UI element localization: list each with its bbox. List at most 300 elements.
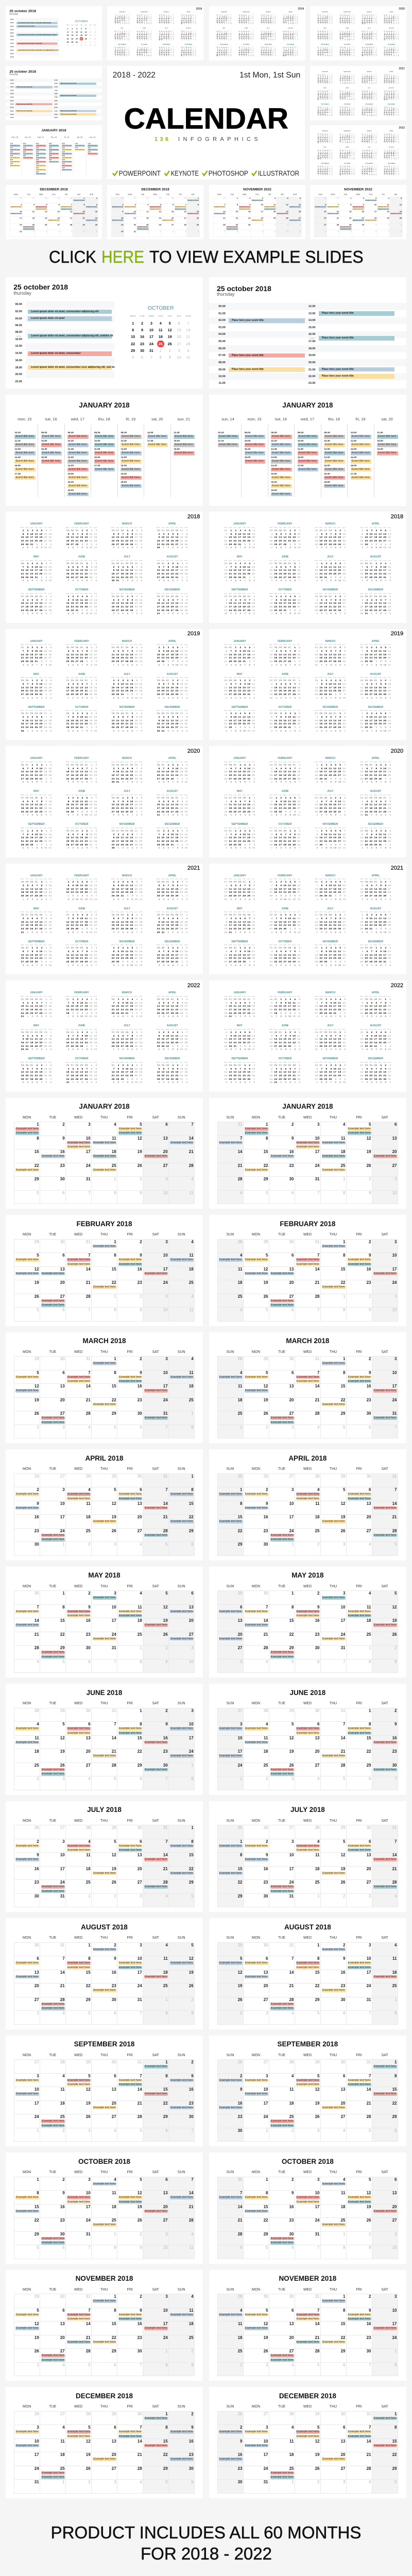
date grid: 21 bbox=[138, 2452, 142, 2457]
date grid bbox=[217, 2059, 398, 2142]
date grid: 8 bbox=[62, 1605, 65, 1609]
month: FEB bbox=[262, 640, 307, 673]
date grid: Example text here bbox=[67, 1141, 90, 1144]
date grid: 20 bbox=[289, 1280, 294, 1285]
date grid: 12 bbox=[138, 1136, 142, 1141]
date grid: Example text here bbox=[145, 1885, 167, 1888]
day columns: 08.25 bbox=[94, 431, 100, 434]
day columns: Event title here bbox=[299, 468, 317, 471]
date grid: 3 bbox=[62, 1425, 65, 1430]
date grid: 5 bbox=[37, 1308, 39, 1312]
month: MAR bbox=[358, 130, 381, 147]
date grid: 30 bbox=[138, 2349, 142, 2353]
date grid: 1 bbox=[343, 2232, 345, 2236]
month: JAN: SUN MON TUE WED THU FRI SAT bbox=[224, 761, 255, 763]
day columns: Event title here bbox=[299, 443, 317, 446]
date grid: 12 bbox=[86, 2439, 91, 2444]
panel: year 2018 thumbnail bbox=[107, 6, 203, 60]
month: JAN: JANUARY bbox=[30, 757, 43, 760]
date grid: 12 bbox=[163, 1605, 168, 1609]
month: JUN: 31 1 2 3 4 5 6 7 8 9 10 11 12 13 14 15 16 17 18 19 20 21 22 23 24 25 26 27 28 29 30 1 2 3 4 5 6 7 8 9 10 11 bbox=[66, 914, 97, 934]
month: NOV bbox=[105, 940, 150, 973]
date grid bbox=[217, 1942, 398, 2025]
agenda title: 25 october 2018 bbox=[10, 70, 36, 73]
date grid: Example text here bbox=[74, 199, 84, 201]
title: NOVEMBER 2018 bbox=[279, 2275, 336, 2282]
month: JAN: JANUARY bbox=[221, 11, 227, 13]
date grid: 16 bbox=[315, 1618, 319, 1623]
date grid: 30 bbox=[112, 1997, 116, 2002]
date grid: Example text here bbox=[374, 2417, 396, 2420]
date grid: 20 bbox=[289, 2335, 294, 2340]
date grid: 7 bbox=[191, 2177, 194, 2182]
date grid: 6 bbox=[369, 1776, 371, 1781]
date grid: Example text here bbox=[374, 2210, 396, 2213]
date grid: 26 bbox=[238, 1997, 242, 2002]
date grid: 8 bbox=[165, 2074, 168, 2078]
date grid: Example text here bbox=[322, 1403, 345, 1406]
month: OCT: SUN MON TUE WED THU FRI SAT bbox=[269, 593, 301, 595]
month: MAY bbox=[217, 673, 262, 706]
month: NOV: NOVEMBER bbox=[119, 940, 135, 943]
weekday header: FRI bbox=[356, 1702, 362, 1705]
date grid: 27 bbox=[112, 2114, 116, 2119]
date grid: 17 bbox=[238, 1749, 242, 1754]
date grid: 30 bbox=[341, 2412, 345, 2416]
day columns: Event title here bbox=[272, 484, 290, 487]
date grid: 5 bbox=[338, 230, 339, 233]
month: AUG bbox=[150, 790, 195, 823]
month: APR: 30 31 1 2 3 4 5 6 7 8 9 10 11 12 13 14 15 16 17 18 19 20 21 22 23 24 25 26 27 28 29 30 1 2 3 4 5 6 7 8 9 10 bbox=[157, 764, 187, 784]
date grid: 9 bbox=[291, 2191, 294, 2195]
panel: two-column agenda thumbnail: 13.00 bbox=[54, 83, 58, 84]
month: JUN: 27 28 29 30 31 1 2 3 4 5 6 7 8 9 10 11 12 13 14 15 16 17 18 19 20 21 22 23 24 25 26 27 28 29 30 1 2 3 4 5 6 7 bbox=[269, 563, 300, 582]
date grid: Example text here bbox=[353, 219, 364, 221]
date grid: 7 bbox=[394, 1839, 397, 1844]
date grid: 11 bbox=[238, 2321, 242, 2326]
weekday header bbox=[14, 2053, 194, 2058]
date grid: Example text here bbox=[348, 1127, 370, 1130]
month: JUL: JULY bbox=[368, 88, 371, 89]
date grid: 3 bbox=[394, 1177, 397, 1181]
month: NOV bbox=[105, 823, 150, 856]
date grid: 23 bbox=[248, 217, 250, 219]
weekday header: SUN bbox=[178, 1350, 185, 1354]
month: AUG: MON TUE WED THU FRI SAT SUN bbox=[157, 794, 188, 796]
date grid: 17 bbox=[35, 2101, 39, 2106]
date grid: 7 bbox=[291, 1956, 294, 1961]
weekday header: MON bbox=[252, 1116, 260, 1119]
month: NOV: MON TUE WED THU FRI SAT SUN bbox=[261, 46, 276, 47]
weekday header: THU bbox=[369, 194, 372, 196]
date grid: 24 bbox=[86, 2218, 91, 2223]
panel: March 2018, Monday start bbox=[6, 1332, 203, 1443]
date grid: Example text here bbox=[119, 1497, 142, 1500]
date grid: 2 bbox=[369, 1294, 371, 1299]
date grid: 27 bbox=[60, 2412, 65, 2416]
date grid: 3 bbox=[37, 2425, 39, 2430]
date grid: 10 bbox=[163, 2308, 168, 2313]
panel: daily agenda with mini calendar: 04.00 bbox=[15, 317, 22, 320]
month: OCT: 29 30 1 2 3 4 5 6 7 8 9 10 11 12 13 14 15 16 17 18 19 20 21 22 23 24 25 26 27 28 29 30 31 1 2 3 4 5 6 7 8 9 bbox=[269, 713, 300, 733]
date grid: 4 bbox=[37, 1722, 39, 1726]
panel: agenda thumbnail: Lorem ipsum dolor sit amet, consectetur bbox=[18, 43, 42, 44]
panel: two-column agenda thumbnail: 16.00 bbox=[54, 93, 58, 95]
date grid: Example text here bbox=[245, 1961, 267, 1964]
date grid: Example text here bbox=[227, 228, 237, 230]
mini calendar dates: 2 bbox=[169, 348, 171, 353]
date grid: 2 bbox=[191, 1997, 194, 2002]
date grid: 26 bbox=[189, 1984, 194, 1988]
day columns: Event title here bbox=[299, 435, 317, 438]
mini calendar dates: 6 bbox=[90, 28, 91, 30]
date grid: 7 bbox=[317, 1308, 319, 1312]
date grid: 24 bbox=[35, 2114, 39, 2119]
mini calendar dates: 19 bbox=[168, 334, 172, 339]
date grid: 20 bbox=[171, 217, 174, 219]
panel: cover bbox=[107, 66, 305, 179]
month: SEP: SUN MON TUE WED THU FRI SAT bbox=[224, 593, 255, 595]
date grid: 8 bbox=[191, 1776, 194, 1781]
month: MAY: 1 2 3 4 5 6 7 8 9 10 11 12 13 14 15 16 17 18 19 20 21 22 23 24 25 26 27 28 29 30 31 1 2 3 4 5 6 7 8 9 10 11 bbox=[224, 1031, 255, 1051]
month: JUN bbox=[262, 555, 307, 588]
month: SEP: 26 27 28 29 30 31 1 2 3 4 5 6 7 8 9 10 11 12 13 14 15 16 17 18 19 20 21 22 23 24 25 26 27 28 29 30 1 2 3 4 5 6 bbox=[216, 47, 231, 57]
date grid: 13 bbox=[138, 1501, 142, 1506]
date grid: 8 bbox=[37, 1136, 39, 1141]
date grid: Example text here bbox=[93, 1948, 116, 1951]
date grid: Example text here bbox=[271, 1303, 293, 1307]
date grid: Example text here bbox=[348, 2079, 370, 2082]
weekday header: TUE bbox=[49, 2171, 56, 2174]
date grid: Example text here bbox=[219, 2196, 242, 2199]
month: MAY: SUN MON TUE WED THU FRI SAT bbox=[224, 911, 255, 913]
date grid: 9 bbox=[369, 2308, 371, 2313]
date grid: 6 bbox=[191, 2480, 194, 2484]
month: SEP: SEPTEMBER bbox=[231, 823, 248, 826]
date grid: 17 bbox=[189, 1736, 194, 1740]
panel: October 2018, Sunday start bbox=[209, 2153, 406, 2264]
date grid: 23 bbox=[367, 1280, 371, 1285]
date grid: Example text here bbox=[145, 2327, 167, 2330]
panel: two-column daily agenda: 01.00 bbox=[218, 312, 226, 315]
month: SEP: SEPTEMBER bbox=[231, 706, 248, 709]
title: DECEMBER 2018 bbox=[76, 2392, 133, 2400]
day columns: Event title here bbox=[378, 451, 397, 454]
date grid: 6 bbox=[140, 1487, 142, 1492]
date grid: 5 bbox=[291, 1659, 294, 1664]
panel: November 2022 thumbnail, Monday start bbox=[209, 185, 305, 239]
date grid: 22 bbox=[112, 1280, 116, 1285]
day columns: Event title here bbox=[89, 149, 97, 150]
day columns: 14.40 bbox=[10, 155, 13, 156]
date grid: 23 bbox=[138, 1280, 142, 1285]
day columns: 13.00 bbox=[121, 456, 127, 459]
date grid: 18 bbox=[189, 2321, 194, 2326]
date grid: 10 bbox=[35, 2439, 39, 2444]
date grid: 21 bbox=[289, 1984, 294, 1988]
month: JUN: 28 29 30 31 1 2 3 4 5 6 7 8 9 10 11 12 13 14 15 16 17 18 19 20 21 22 23 24 25 26 27 28 29 30 1 2 3 4 5 6 7 8 bbox=[66, 563, 97, 582]
date grid: 30 bbox=[264, 1591, 268, 1596]
month: AUG: AUGUST bbox=[186, 28, 191, 29]
date grid: 20 bbox=[138, 1515, 142, 1519]
month: MAR: MARCH bbox=[367, 71, 372, 73]
month: JAN: MON TUE WED THU FRI SAT SUN bbox=[21, 878, 52, 880]
weekday header bbox=[14, 1936, 194, 1940]
date grid: 22 bbox=[315, 1984, 319, 1988]
month: JUL: 29 30 1 2 3 4 5 6 7 8 9 10 11 12 13 14 15 16 17 18 19 20 21 22 23 24 25 26 27 28 29 30 31 1 2 3 4 5 6 7 8 9 bbox=[112, 797, 142, 817]
day columns: Event title here bbox=[89, 145, 97, 146]
weekday header: FRI bbox=[356, 2287, 362, 2292]
date grid bbox=[111, 197, 199, 237]
month: JAN bbox=[314, 71, 336, 88]
date grid: 3 bbox=[369, 1894, 371, 1899]
date grid: 3 bbox=[343, 1542, 345, 1547]
date grid: 27 bbox=[86, 1763, 91, 1768]
heading: click here bbox=[0, 242, 412, 273]
date grid: 25 bbox=[315, 1880, 319, 1885]
weekday header: SAT bbox=[381, 2287, 388, 2292]
heading: product includes bbox=[0, 2519, 412, 2566]
date grid: Example text here bbox=[322, 1754, 345, 1757]
day columns: 11.30 bbox=[377, 431, 383, 434]
panel: two-column daily agenda: Place here your event title bbox=[322, 336, 354, 340]
date grid: Example text here bbox=[322, 1989, 345, 1992]
panel: December 2018, Monday start bbox=[6, 2387, 203, 2498]
month: MAR: 1 2 3 4 5 6 7 8 9 10 11 12 13 14 15 16 17 18 19 20 21 22 23 24 25 26 27 28 29 30 31 1 2 3 4 5 6 7 8 9 10 11 bbox=[315, 764, 346, 784]
date grid: Example text here bbox=[42, 1651, 64, 1654]
date grid: 2 bbox=[46, 230, 47, 233]
date grid bbox=[213, 197, 301, 237]
mini calendar dates: 4 bbox=[187, 348, 190, 353]
day columns: Event title here bbox=[62, 145, 72, 146]
date grid: 2 bbox=[291, 2128, 294, 2133]
month: JUN: JUNE bbox=[78, 907, 85, 910]
date grid: Example text here bbox=[374, 1389, 396, 1392]
date grid: 3 bbox=[287, 224, 288, 226]
date grid: 12 bbox=[35, 1267, 39, 1272]
date grid: 15 bbox=[235, 210, 238, 213]
date grid: 14 bbox=[163, 1853, 168, 1857]
date grid: Example text here bbox=[67, 1258, 90, 1261]
month: FEB: 31 1 2 3 4 5 6 7 8 9 10 11 12 13 14 15 16 17 18 19 20 21 22 23 24 25 26 27 28 1 2 3 4 5 6 7 8 9 10 11 12 13 bbox=[66, 998, 97, 1018]
date grid: 18 bbox=[146, 217, 148, 219]
month: NOV: MON TUE WED THU FRI SAT SUN bbox=[111, 593, 143, 595]
month: JUN: JUNE bbox=[244, 28, 248, 29]
date grid bbox=[14, 1825, 195, 1907]
date grid: Example text here bbox=[16, 1506, 39, 1510]
mini calendar dates: 7 bbox=[150, 355, 152, 360]
mini calendar dates: 10 bbox=[149, 328, 153, 332]
mini calendar dates: 31 bbox=[149, 348, 153, 353]
date grid: 4 bbox=[317, 1839, 319, 1844]
date grid: 31 bbox=[20, 230, 22, 233]
date grid: 28 bbox=[238, 1240, 242, 1244]
date grid: 12 bbox=[341, 1501, 345, 1506]
weekday header: FRI bbox=[179, 194, 182, 196]
date grid: 23 bbox=[362, 217, 364, 219]
date grid: Example text here bbox=[119, 1380, 142, 1383]
date grid: 8 bbox=[191, 1839, 194, 1844]
date grid: 5 bbox=[37, 2245, 39, 2250]
month: JUN: JUNE bbox=[281, 555, 288, 558]
weekday header: WED bbox=[153, 194, 157, 196]
date grid: 11 bbox=[367, 1605, 371, 1609]
date grid: 20 bbox=[58, 217, 60, 219]
month: APR bbox=[353, 757, 398, 790]
day columns: Event title here bbox=[122, 451, 140, 454]
date grid: 29 bbox=[341, 1474, 345, 1479]
date grid: 4 bbox=[343, 1122, 345, 1127]
month: SEP bbox=[217, 706, 262, 739]
date grid: 3 bbox=[135, 204, 136, 206]
panel: daily agenda with mini calendar bbox=[6, 277, 203, 388]
month: DEC: 29 30 1 2 3 4 5 6 7 8 9 10 11 12 13 14 15 16 17 18 19 20 21 22 23 24 25 26 27 28 29 30 31 1 2 3 4 5 6 7 8 9 bbox=[360, 830, 391, 850]
date grid: 20 bbox=[341, 2452, 345, 2457]
date grid: 8 bbox=[114, 2308, 116, 2313]
panel: May 2018, Sunday start bbox=[209, 1566, 406, 1677]
weekday header: THU bbox=[330, 1467, 337, 1471]
date grid: Example text here bbox=[170, 1258, 193, 1261]
date grid: 8 bbox=[266, 2191, 268, 2195]
weekday header: FRI bbox=[356, 1585, 362, 1588]
date grid: 5 bbox=[394, 1591, 397, 1596]
date grid: 21 bbox=[70, 217, 72, 219]
date grid: Example text here bbox=[271, 1155, 293, 1158]
panel: two-column agenda thumbnail: 16.30 bbox=[55, 95, 57, 96]
month: MAR: MARCH bbox=[325, 757, 335, 760]
date grid bbox=[14, 1590, 195, 1673]
date grid: 25 bbox=[112, 2218, 116, 2223]
month: JUL: 27 28 29 30 1 2 3 4 5 6 7 8 9 10 11 12 13 14 15 16 17 18 19 20 21 22 23 24 25 26 27 28 29 30 31 1 2 3 4 5 6 7 bbox=[112, 1031, 142, 1051]
date grid: 27 bbox=[35, 2060, 39, 2064]
date grid: 24 bbox=[112, 1632, 116, 1637]
date grid: 11 bbox=[264, 1736, 268, 1740]
check and label: Photoshop: PHOTOSHOP bbox=[209, 168, 248, 177]
mini calendar dates: 2 bbox=[72, 28, 73, 30]
weekday header: FRI bbox=[356, 2054, 362, 2057]
date grid: 16 bbox=[289, 1149, 294, 1154]
day columns: 15.00 bbox=[298, 456, 303, 459]
month: MAY: SUN MON TUE WED THU FRI SAT bbox=[224, 1029, 255, 1030]
mini calendar weekdays: FRI bbox=[168, 315, 172, 318]
date grid: Example text here bbox=[119, 1131, 142, 1134]
date grid: 26 bbox=[35, 1474, 39, 1479]
day columns: Event title here bbox=[15, 451, 34, 454]
date grid: 3 bbox=[88, 2177, 91, 2182]
month: FEB: 27 28 29 30 31 1 2 3 4 5 6 7 8 9 10 11 12 13 14 15 16 17 18 19 20 21 22 23 24 25 26 27 28 29 1 2 3 4 5 6 7 8 bbox=[66, 764, 97, 784]
date grid: Example text here bbox=[297, 2200, 319, 2204]
date grid: Example text here bbox=[67, 1849, 90, 1852]
date grid: 30 bbox=[60, 1357, 65, 1361]
day columns: 14.00 bbox=[75, 143, 78, 144]
day columns: 11.50 bbox=[94, 448, 100, 450]
weekday header: SAT bbox=[152, 1350, 159, 1354]
panel: two-column agenda thumbnail: Place here your event title bbox=[17, 87, 32, 88]
date grid: Example text here bbox=[170, 2196, 193, 2199]
date grid: Example text here bbox=[42, 1303, 64, 1307]
date grid: 5 bbox=[37, 1370, 39, 1375]
day columns: 10.20 bbox=[218, 431, 224, 434]
month: FEB: FEBRUARY bbox=[344, 71, 351, 73]
date grid: Example text here bbox=[322, 2458, 345, 2461]
date grid bbox=[14, 1708, 195, 1790]
month: NOV bbox=[307, 588, 353, 621]
mini calendar weekdays: WED bbox=[148, 315, 154, 318]
date grid: 3 bbox=[262, 197, 263, 199]
month: JUL: 1 2 3 4 5 6 7 8 9 10 11 12 13 14 15 16 17 18 19 20 21 22 23 24 25 26 27 28 29 30 31 1 2 3 4 5 6 7 8 9 10 11 bbox=[315, 563, 346, 582]
title: SEPTEMBER 2018 bbox=[74, 2040, 134, 2048]
month: OCT: OCTOBER bbox=[75, 940, 89, 943]
month: MAR bbox=[105, 640, 150, 673]
day columns: Event title here bbox=[15, 460, 34, 463]
date grid: 27 bbox=[163, 2218, 168, 2223]
month: JUL: JULY bbox=[266, 28, 270, 29]
panel: two-column daily agenda: 18.00 bbox=[308, 347, 315, 350]
date grid: 13 bbox=[238, 1618, 242, 1623]
day columns: Event title here bbox=[68, 493, 87, 496]
date grid: 7 bbox=[317, 1253, 319, 1258]
date grid: 2 bbox=[369, 2232, 371, 2236]
date grid: 5 bbox=[88, 2011, 91, 2015]
date grid: Example text here bbox=[348, 2083, 370, 2086]
date grid: 22 bbox=[238, 1880, 242, 1885]
date grid: 8 bbox=[114, 1370, 116, 1375]
date grid: 11 bbox=[138, 1605, 142, 1609]
date grid: 28 bbox=[315, 1411, 319, 1416]
date grid: 3 bbox=[37, 2011, 39, 2015]
date grid: 29 bbox=[315, 2060, 319, 2064]
month: NOV: NOVEMBER bbox=[119, 823, 135, 826]
panel: daily agenda with mini calendar: Lorem ipsum dolor sit amet, consectetur scsc adipiscing elit, sed do bbox=[31, 366, 115, 369]
date grid: Example text here bbox=[11, 213, 22, 214]
date grid: 12 bbox=[189, 1956, 194, 1961]
date grid: 3 bbox=[21, 204, 22, 206]
date grid: Example text here bbox=[145, 2065, 167, 2068]
title: JULY 2018 bbox=[87, 1806, 122, 1814]
day columns: 19.00 bbox=[271, 489, 277, 492]
day columns: 11.15 bbox=[10, 147, 13, 148]
agenda events bbox=[6, 277, 203, 278]
panel: weekly view thumbnail bbox=[6, 125, 102, 179]
date grid: Example text here bbox=[170, 1727, 193, 1730]
month: SEP: SUN MON TUE WED THU FRI SAT bbox=[224, 1062, 255, 1063]
date grid: 24 bbox=[261, 217, 263, 219]
month: DEC: 30 1 2 3 4 5 6 7 8 9 10 11 12 13 14 15 16 17 18 19 20 21 22 23 24 25 26 27 28 29 30 31 1 2 3 4 5 6 7 8 9 10 bbox=[157, 830, 187, 850]
weekday header: TUE bbox=[49, 1467, 56, 1471]
month: NOV: 26 27 28 29 30 31 1 2 3 4 5 6 7 8 9 10 11 12 13 14 15 16 17 18 19 20 21 22 23 24 25 26 27 28 29 30 1 2 3 4 5 6 bbox=[362, 47, 377, 57]
date grid: 6 bbox=[300, 197, 301, 199]
day columns: Event title here bbox=[68, 443, 87, 446]
date grid: 6 bbox=[59, 204, 60, 206]
month: JUN: JUNE bbox=[78, 1024, 85, 1027]
month: NOV bbox=[307, 1057, 353, 1090]
month: NOV: 28 29 30 31 1 2 3 4 5 6 7 8 9 10 11 12 13 14 15 16 17 18 19 20 21 22 23 24 25 26 27 28 29 30 1 2 3 4 5 6 7 8 bbox=[112, 713, 142, 733]
date grid: 6 bbox=[394, 1122, 397, 1127]
date grid: 24 bbox=[374, 217, 376, 219]
month: SEP bbox=[217, 823, 262, 856]
date grid: 18 bbox=[367, 1618, 371, 1623]
month: APR: MON TUE WED THU FRI SAT SUN bbox=[157, 527, 188, 529]
date grid: 20 bbox=[324, 217, 327, 219]
weekday header: THU bbox=[255, 194, 259, 196]
day columns: Event title here bbox=[246, 451, 264, 454]
weekday header: tue, 16 bbox=[275, 417, 287, 421]
date grid: Example text here bbox=[245, 1844, 267, 1848]
day columns: Event title here bbox=[352, 460, 370, 463]
agenda day: thursday bbox=[10, 73, 18, 76]
agenda day: thursday bbox=[13, 291, 31, 296]
date grid: 26 bbox=[138, 1163, 142, 1168]
